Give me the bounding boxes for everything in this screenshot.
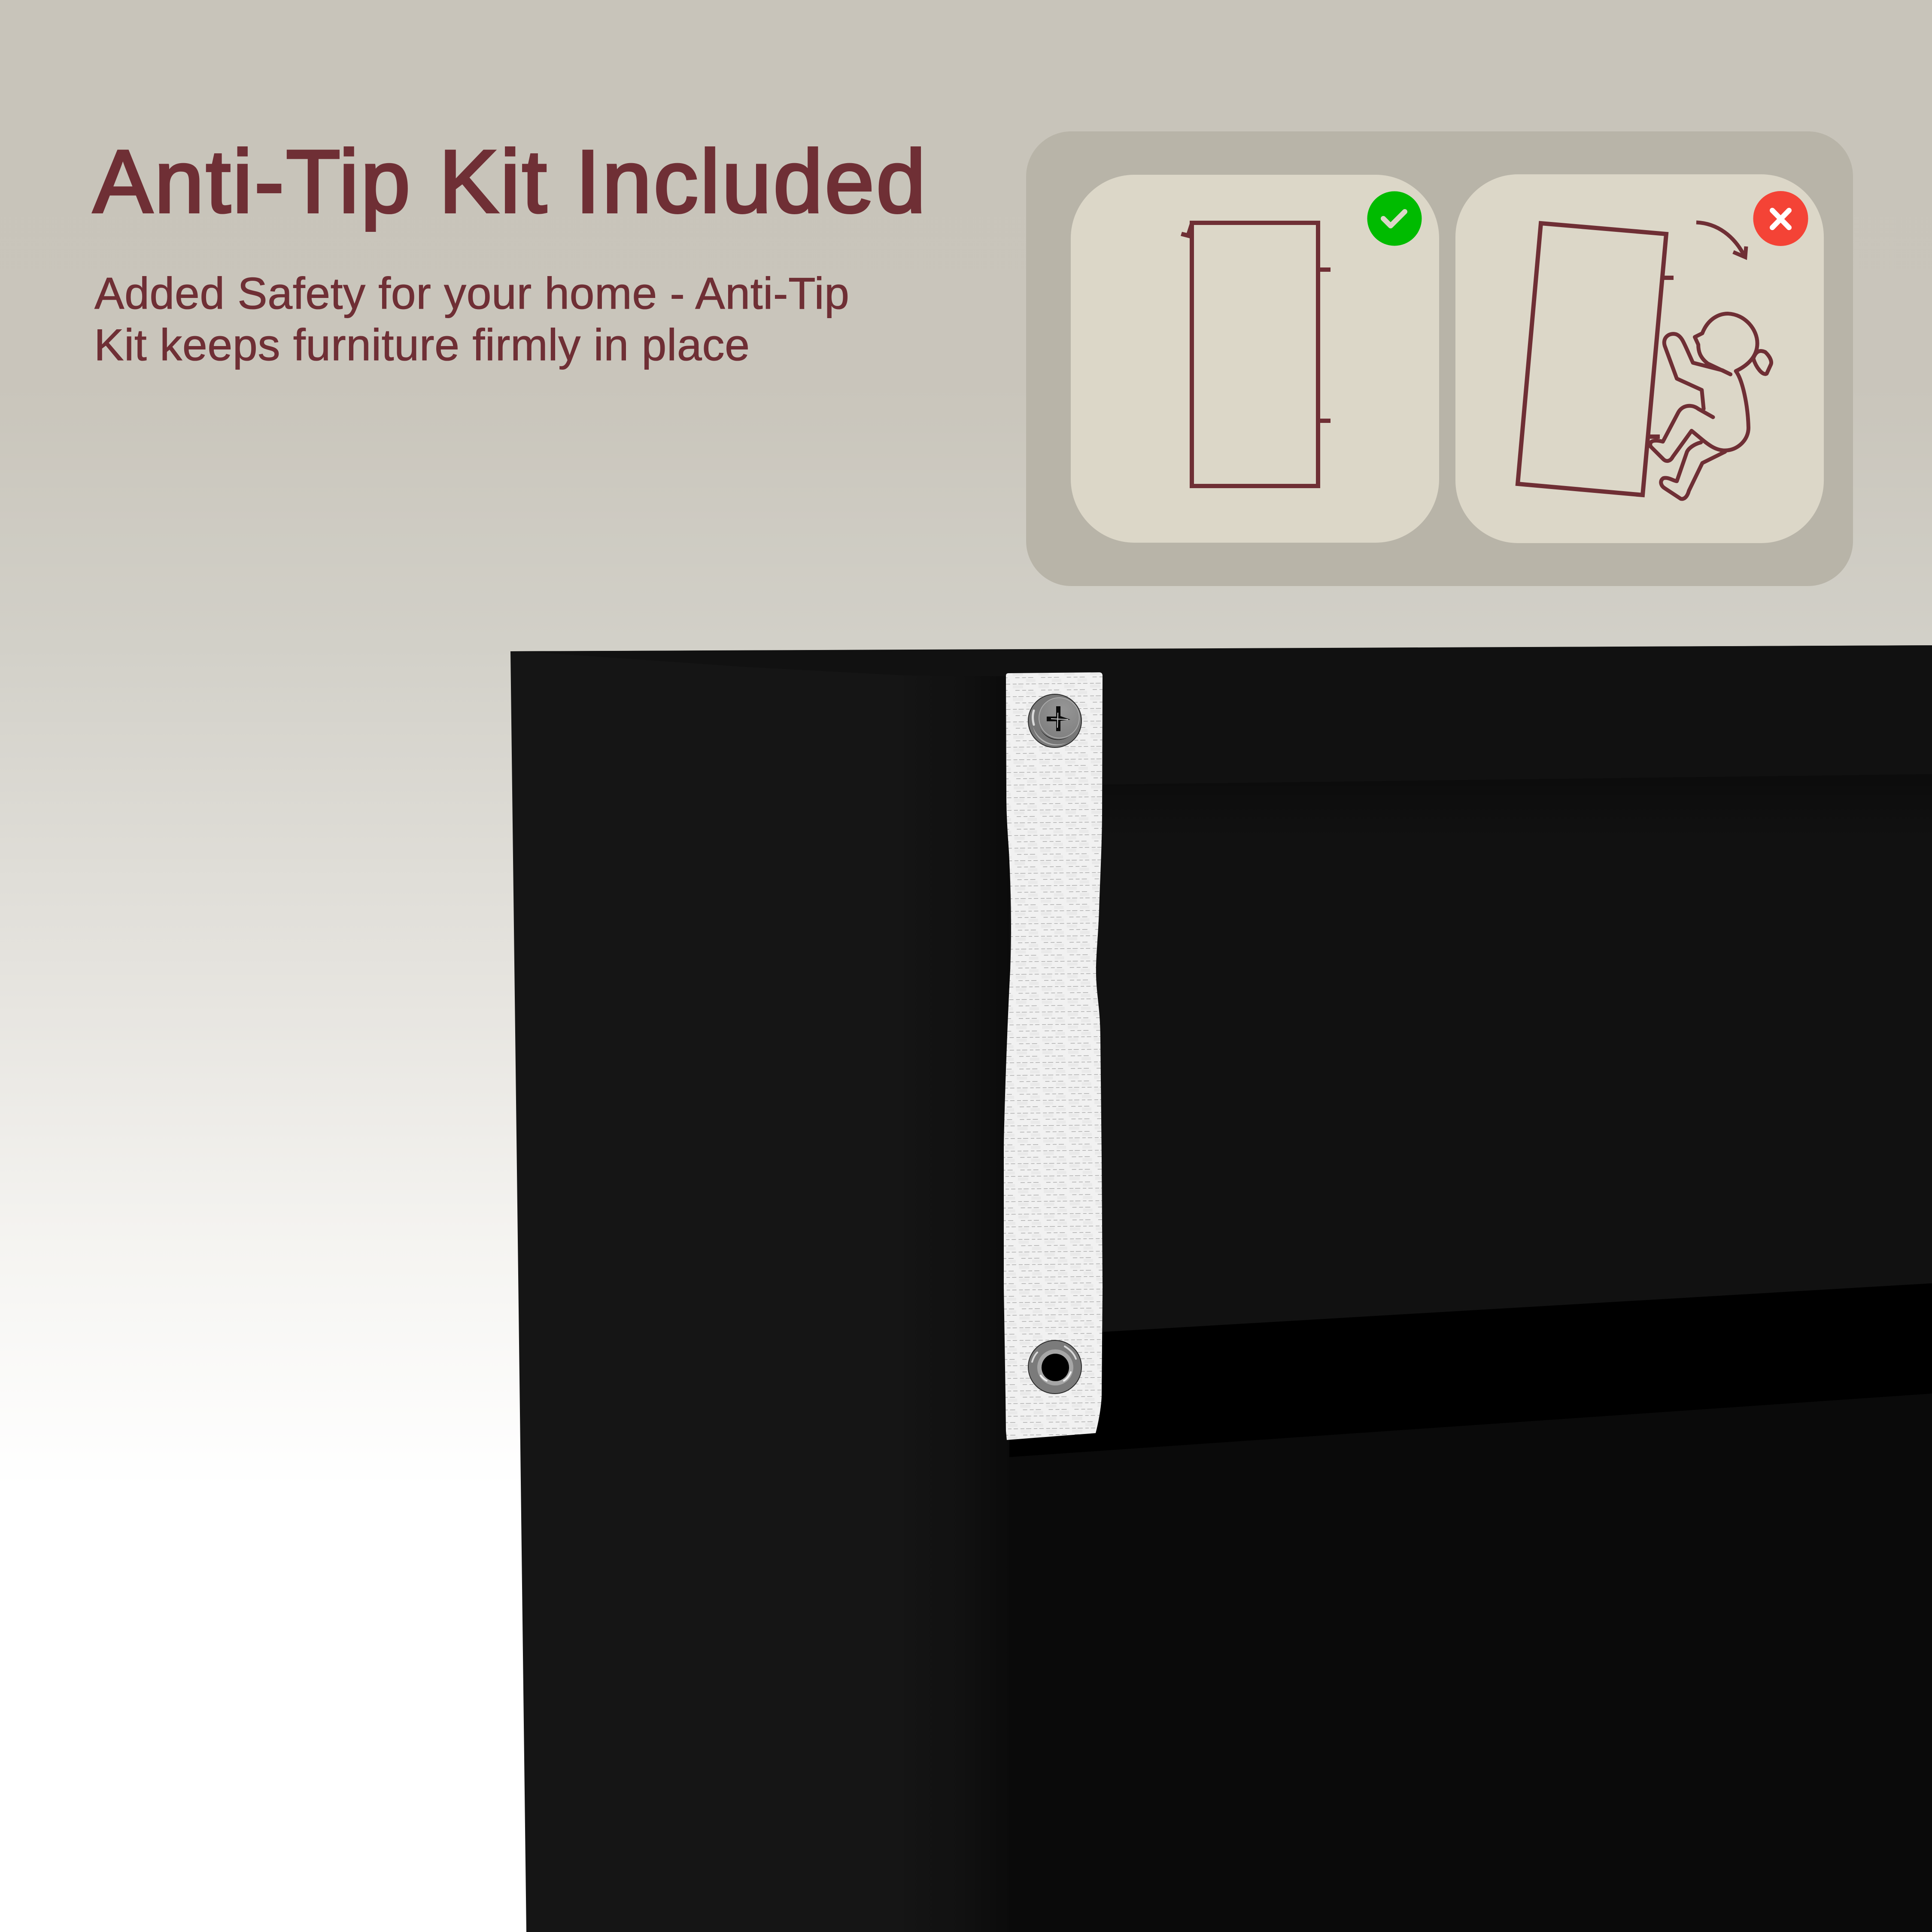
anti-tip strap	[1004, 672, 1103, 1440]
icon: green check badge	[1367, 191, 1422, 246]
icon: upright dresser with anchors	[1181, 221, 1331, 486]
top surface	[510, 645, 1932, 786]
screw	[1028, 694, 1081, 747]
panel background	[1026, 131, 1853, 586]
subtitle text block	[94, 269, 849, 370]
icon: climbing child	[1650, 313, 1771, 499]
furniture: black dresser	[510, 645, 1932, 1932]
arrow: tipping direction	[1696, 222, 1746, 257]
grommet	[1028, 1340, 1081, 1394]
webbing strap	[1004, 672, 1103, 1440]
shelf gap	[1009, 1283, 1932, 1457]
screw cross slot	[1047, 706, 1070, 731]
drawer front	[1009, 774, 1932, 1337]
lower drawer front	[1009, 1394, 1932, 1932]
icon: red cross badge	[1753, 191, 1808, 246]
icon: tilted dresser	[1518, 223, 1674, 495]
subtitle text block: Added Safety for your home - Anti-Tip	[94, 269, 849, 319]
side panel front edge shading	[904, 670, 1009, 1932]
subtitle text block: Kit keeps furniture firmly in place	[94, 320, 750, 370]
title: Anti-Tip Kit Included	[93, 132, 926, 231]
card: unsecured furniture tipping	[1455, 174, 1824, 543]
side panel	[510, 645, 1932, 1932]
panel: safety comparison	[1026, 131, 1853, 586]
card: secured furniture	[1071, 175, 1439, 543]
